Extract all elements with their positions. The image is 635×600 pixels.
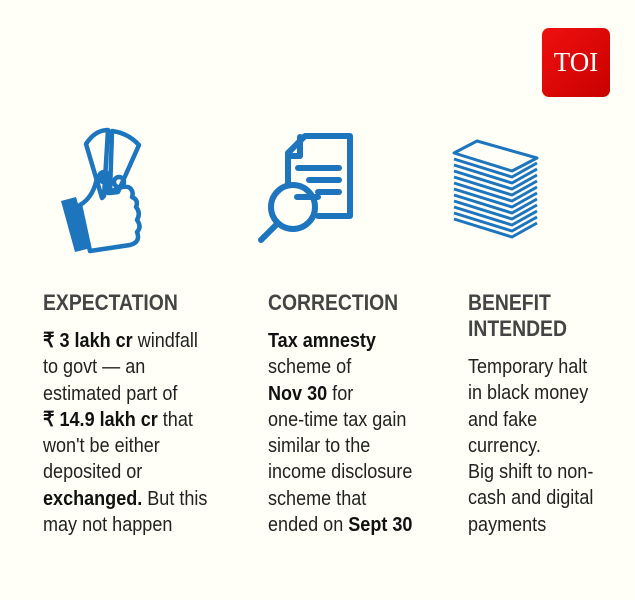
logo: TOI: [542, 28, 610, 97]
text: expectation: won't be either: [43, 434, 160, 457]
heading: benefit intended: [468, 290, 567, 341]
text: correction: income disclosure: [268, 460, 412, 483]
text: expectation: may not happen: [43, 513, 172, 536]
text: correction: Tax amnesty: [268, 329, 376, 352]
heading: correction: CORRECTION: [268, 290, 398, 315]
text: correction: scheme that: [268, 487, 366, 510]
text: expectation: ₹ 3 lakh cr windfall: [43, 329, 198, 352]
text: benefit: cash and digital: [468, 486, 593, 509]
text: benefit: and fake: [468, 408, 537, 431]
text: correction: similar to the: [268, 434, 370, 457]
text: expectation: estimated part of: [43, 382, 177, 405]
text: benefit: payments: [468, 513, 546, 536]
text: correction: [268, 329, 412, 536]
text: benefit: Temporary halt: [468, 355, 587, 378]
text: correction: ended on Sept 30: [268, 513, 412, 536]
text: expectation: exchanged. But this: [43, 487, 207, 510]
heading: benefit intended: BENEFIT: [468, 290, 551, 315]
heading: benefit intended: INTENDED: [468, 316, 567, 341]
icon: document with magnifier: [258, 133, 353, 243]
text: benefit: in black money: [468, 381, 588, 404]
text: correction: scheme of: [268, 355, 351, 378]
text: benefit: Big shift to non-: [468, 460, 593, 483]
text: expectation: [43, 329, 207, 536]
text: expectation: to govt — an: [43, 355, 145, 378]
text: benefit: [468, 355, 593, 536]
text: correction: Nov 30 for: [268, 382, 353, 405]
icon: hand holding cash: [61, 128, 142, 254]
text: expectation: ₹ 14.9 lakh cr that: [43, 408, 193, 431]
logo: TOI: TOI: [554, 47, 598, 77]
text: correction: one-time tax gain: [268, 408, 406, 431]
heading: expectation: EXPECTATION: [43, 290, 178, 315]
icon: stack of paper: [452, 140, 538, 238]
text: benefit: currency.: [468, 434, 541, 457]
text: expectation: deposited or: [43, 460, 142, 483]
